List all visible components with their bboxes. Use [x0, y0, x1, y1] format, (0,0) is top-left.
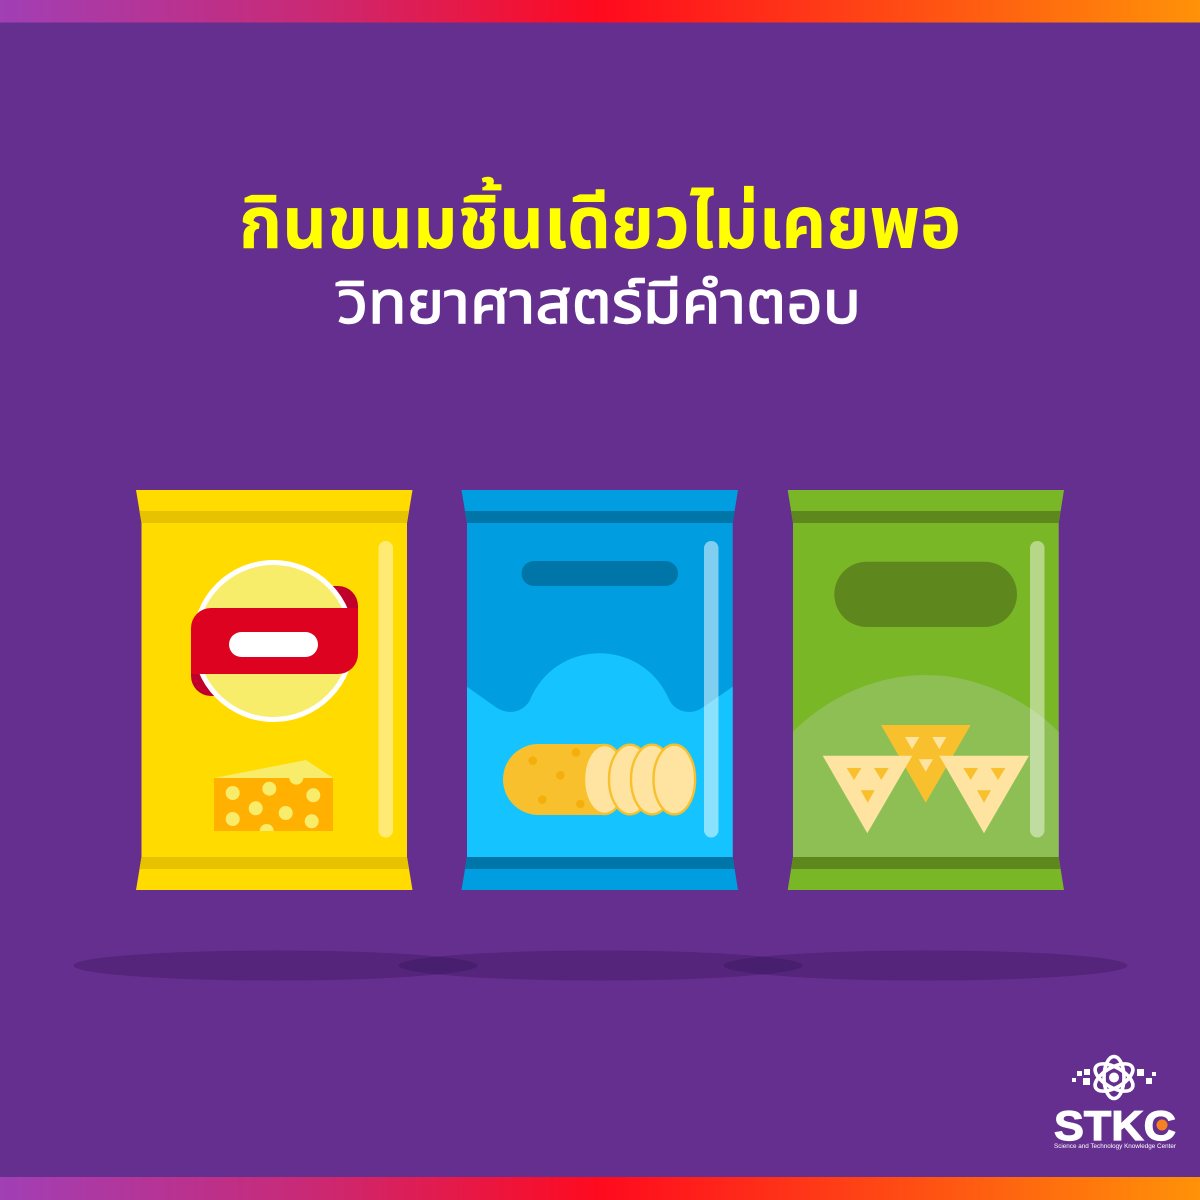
tagline: Science and Technology Knowledge Center	[1054, 1144, 1176, 1150]
top gradient bar	[0, 0, 1200, 22]
logo: STKC	[1054, 1056, 1176, 1150]
title: กินขนมชิ้นเดียวไม่เคยพอ	[239, 176, 961, 264]
label pill	[522, 561, 678, 586]
bottom gradient bar	[0, 1177, 1200, 1200]
subtitle: วิทยาศาสตร์มีคำตอบ	[336, 270, 861, 336]
label pill	[834, 562, 1017, 627]
icon: potato chip with label	[191, 562, 358, 720]
icon: sliced potato	[503, 744, 695, 815]
bag highlight	[1030, 541, 1044, 838]
wordmark: STKC	[1054, 1102, 1176, 1149]
icon: nacho chips	[823, 725, 1029, 833]
icon: cheese wedge	[214, 760, 333, 838]
bag highlight	[378, 541, 393, 838]
panel: blue potato bag	[462, 490, 738, 890]
icon: atom emblem	[1091, 1056, 1137, 1098]
icon: pixel dots	[1072, 1069, 1156, 1085]
panel: yellow chip bag	[136, 490, 412, 890]
bag shadows	[74, 950, 1128, 980]
bag highlight	[704, 541, 718, 838]
panel: green nacho bag	[788, 490, 1064, 890]
icon: orange dot	[1156, 1120, 1168, 1130]
